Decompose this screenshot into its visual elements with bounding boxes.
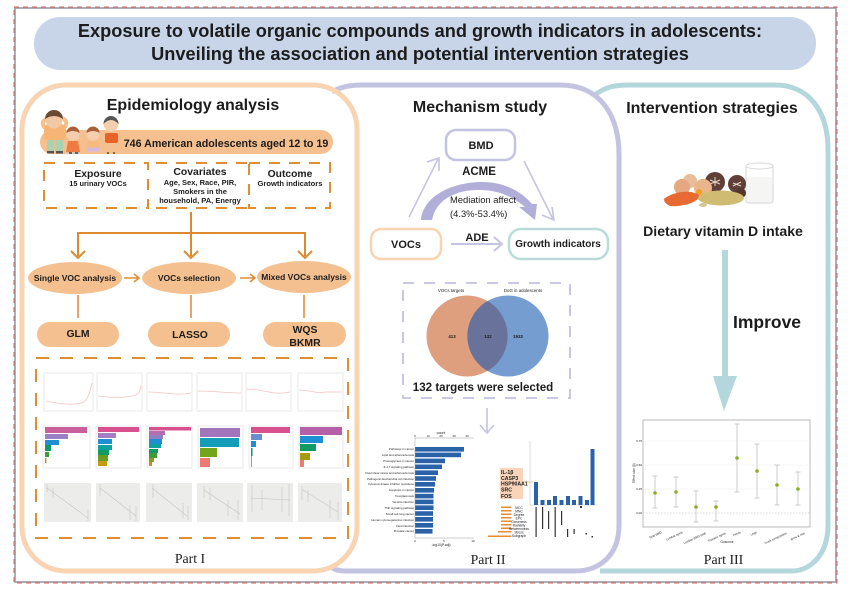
chart: effect size plot: Pelvis [732, 530, 742, 537]
dashed box: exposure, covariates, outcome [44, 163, 330, 208]
chart: upset plot: MNC [515, 510, 523, 514]
venn diagram: 413 [448, 334, 456, 339]
chart: upset plot: Subgraph [512, 534, 526, 538]
venn diagram: 132 [484, 334, 492, 339]
chart: pathway enrichment bars: Proteoglycans in cancer [383, 459, 414, 463]
chart row: RCS curves [44, 373, 343, 411]
arrows between ovals [124, 274, 255, 282]
mediation diagram [371, 130, 608, 259]
chart: effect size plot: Lumbar BMD total [683, 531, 707, 545]
outcome box text: Growth indicators [258, 179, 322, 188]
chart: upset plot: Closeness [511, 520, 527, 524]
VOCs box [371, 229, 441, 259]
chart: effect size plot [632, 420, 810, 545]
chart: upset plot: Radiality [513, 524, 526, 528]
chart: pathway enrichment bars: 0 [414, 539, 416, 543]
method pills: GLM [66, 329, 90, 340]
VOCs box: VOCs [391, 239, 421, 251]
chart: pathway enrichment bars: -log10(P.adj) [432, 543, 450, 547]
flow arrows from covariates [71, 212, 312, 258]
chart: pathway enrichment bars: Yersinia infection [392, 500, 414, 504]
BMD box [446, 130, 515, 160]
chart: effect size plot: Lumbar spine [665, 530, 684, 542]
analysis ovals [28, 261, 351, 294]
mediation effect label: Mediation affect [450, 194, 516, 205]
icon: vitamin D foods [664, 163, 773, 207]
chart: pathway enrichment bars: 20 [439, 434, 443, 438]
callout: hub genes: IL-1β [501, 470, 513, 476]
chart: effect size plot: Trunk composition [764, 531, 788, 545]
outcome box text [258, 169, 322, 188]
sample size banner: 746 American adolescents aged 12 to 19 [124, 138, 328, 150]
title banner: Unveiling the association and potential intervention strategies [151, 44, 689, 64]
analysis ovals: Mixed VOCs analysis [261, 272, 347, 282]
label: dietary vitamin D intake: Dietary vitamin D intake [643, 223, 803, 239]
part label: Part II [471, 552, 506, 567]
exposure box text: 15 urinary VOCs [69, 179, 127, 188]
chart: pathway enrichment bars: Pathways in cancer [389, 447, 414, 451]
growth indicators box [509, 229, 608, 259]
analysis ovals: VOCs selection [158, 273, 220, 283]
method pills: BKMR [289, 338, 321, 349]
callout: hub genes: HSP90AA1 [501, 482, 528, 488]
chart: pathway enrichment bars: IL-17 signaling pathway [384, 465, 415, 469]
panel: mechanism study outline [331, 85, 619, 571]
chart: effect size plot: Effect size (β) [632, 463, 636, 483]
part label: Part III [704, 552, 744, 567]
callout: hub genes [500, 468, 528, 500]
title banner: Exposure to volatile organic compounds and growth indicators in adolescents: [78, 21, 762, 41]
growth indicators box: Growth indicators [515, 239, 601, 250]
upset matrix dots [536, 506, 593, 538]
chart: upset plot: EPC [516, 516, 523, 520]
heading: mechanism study: Mechanism study [413, 99, 547, 116]
heading: epidemiology analysis: Epidemiology analysis [107, 97, 279, 114]
venn diagram: 1933 [513, 334, 523, 339]
method pills [37, 322, 346, 349]
chart: pathway enrichment bars: Prostate cancer [394, 529, 414, 533]
chart: effect size plot: Legs [750, 530, 758, 537]
chart: effect size plot: 0.00 [636, 511, 642, 515]
covariates box text: household, PA, Energy [159, 196, 242, 205]
callout: hub genes: SRC [501, 488, 512, 494]
panel: epidemiology analysis outline [22, 85, 357, 571]
chart: effect size plot: Outcome [721, 540, 734, 544]
chart: upset plot: Degree [514, 513, 525, 517]
chart row: WQS weight bars [43, 426, 343, 468]
dashed box: result plots [36, 358, 348, 538]
chart: pathway enrichment bars: 5 [443, 539, 445, 543]
BMD box: BMD [468, 140, 494, 152]
chart: pathway enrichment bars: 10 [426, 434, 430, 438]
callout: hub genes: FOS [501, 494, 512, 500]
chart: upset plot [488, 441, 597, 538]
chart: upset plot: Stress [514, 530, 524, 534]
path arrows [409, 158, 554, 251]
covariates box text [159, 167, 242, 205]
dashed box: venn [403, 283, 570, 398]
covariates box text: Smokers in the [173, 187, 227, 196]
arrow: improve [713, 250, 801, 411]
chart: pathway enrichment bars: 0 [414, 434, 416, 438]
chart: pathway enrichment bars: count [437, 431, 445, 435]
venn caption: 132 targets were selected [413, 381, 553, 394]
covariates box text: Age, Sex, Race, PIR, [164, 178, 236, 187]
chart: effect size plot: 0.50 [636, 463, 642, 467]
ACME curved arrow [421, 182, 537, 220]
callout: hub genes: CASP3 [501, 476, 518, 482]
chart: effect size plot: Total BMD [648, 530, 663, 540]
method pills: WQS [293, 325, 317, 336]
chart: effect size plot: Thoracic spine [707, 531, 727, 543]
chart: effect size plot: 0.25 [636, 487, 642, 491]
chart: effect size plot: Arms & ribs [790, 531, 806, 541]
ADE label: ADE [465, 232, 489, 244]
panel: epidemiology analysis [28, 97, 351, 566]
icon: adolescents group [43, 110, 118, 154]
mediation effect label: (4.3%-53.4%) [450, 208, 507, 219]
chart: pathway enrichment bars: 40 [465, 434, 469, 438]
chart: pathway enrichment bars: Fluid shear stress and atherosclerosis [365, 471, 415, 475]
chart: effect size plot: 0.75 [636, 439, 642, 443]
venn diagram [426, 288, 548, 376]
chart: pathway enrichment bars: Human cytomegalovirus infection [371, 518, 414, 522]
method pills: LASSO [172, 330, 208, 341]
chart row: BKMR panels [44, 483, 342, 522]
analysis ovals: Single VOC analysis [34, 273, 116, 283]
title banner [34, 17, 816, 70]
chart: pathway enrichment bars [365, 431, 475, 547]
mediation effect label [450, 194, 516, 219]
chart: pathway enrichment bars: Lipid and atherosclerosis [382, 453, 415, 457]
exposure box text [69, 169, 127, 188]
chart: pathway enrichment bars: Cytotoxic-kinase inhibitor resistance [368, 482, 414, 486]
exposure box text: Exposure [74, 169, 122, 180]
panel: intervention strategies outline [596, 85, 828, 571]
chart: upset plot: MCC [515, 506, 523, 510]
panel: mechanism study [365, 99, 608, 567]
outcome box text: Outcome [268, 169, 313, 180]
chart: pathway enrichment bars: Apoptosis in cancer [389, 488, 414, 492]
sample size banner [40, 130, 333, 154]
ACME label: ACME [462, 166, 496, 178]
arrow: improve: Improve [733, 312, 801, 332]
chart: pathway enrichment bars: Fluid infection [396, 524, 414, 528]
chart: pathway enrichment bars: Small cell lung cancer [386, 512, 414, 516]
chart: pathway enrichment bars: 30 [452, 434, 456, 438]
chart: pathway enrichment bars: TNF signaling pathway [385, 506, 415, 510]
chart: pathway enrichment bars: Toxoplasmosis [395, 494, 415, 498]
chart: upset plot: Betweenness [509, 527, 529, 531]
venn diagram: VOCs targets [438, 288, 465, 293]
arrow down to enrichment [480, 408, 494, 433]
chart: pathway enrichment bars: 10 [471, 539, 475, 543]
connectors to methods [78, 295, 304, 318]
covariates box text: Covariates [173, 167, 227, 178]
panel: intervention strategies [626, 100, 810, 567]
venn diagram: DoG in adolescents [504, 288, 543, 293]
part label: Part I [175, 551, 206, 566]
heading: intervention strategies: Intervention strategies [626, 100, 798, 117]
chart: pathway enrichment bars: Pathogenic Escherichia coli infection [367, 477, 414, 481]
